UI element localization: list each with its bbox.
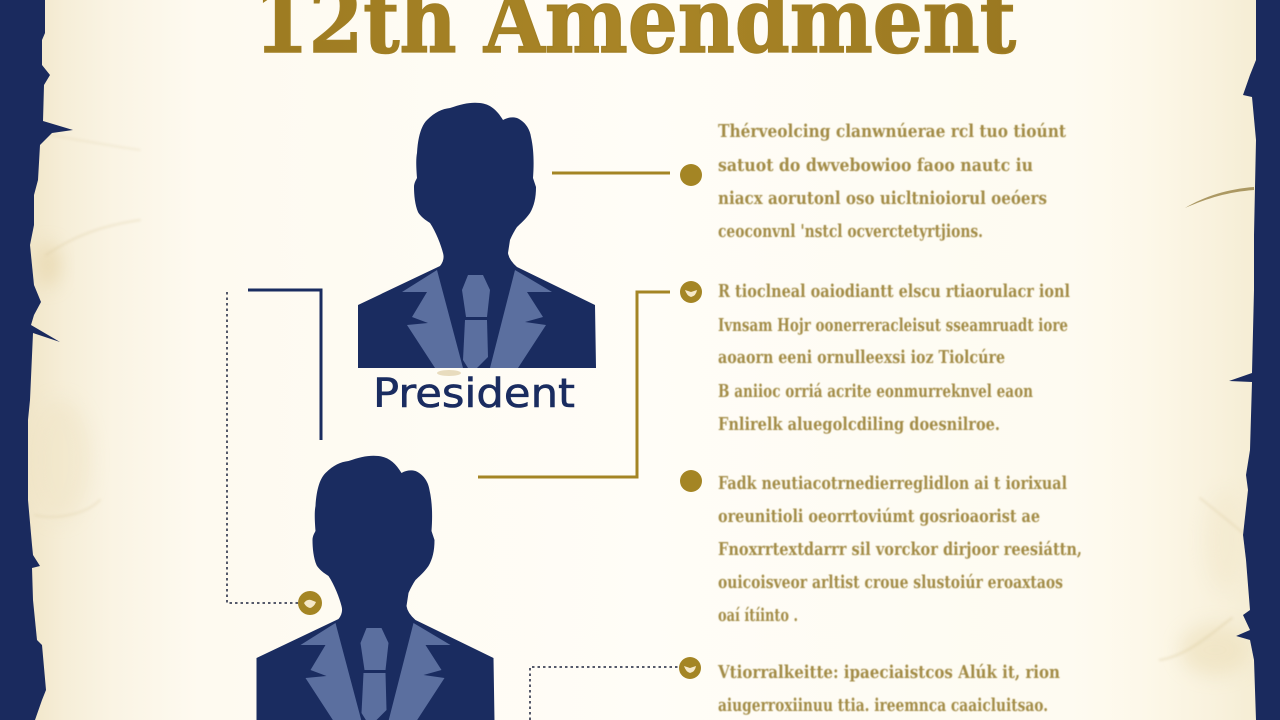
text block 3: Fnoxrrtextdarrr sil vorckor dirjoor reesiáttn, [718,539,1082,560]
text block 3: ouicoisveor arltist croue slustoiúr eroaxtaos [718,572,1063,593]
text block 2: Ivnsam Hojr oonerreracleisut sseamruadt iore [718,315,1068,336]
gold connector: second figure to second text [478,292,670,477]
figure: President silhouette [358,103,596,376]
text block 4: Vtiorralkeitte: ipaeciaistcos Alúk it, rion [717,662,1060,683]
text block 2: R tioclneal oaiodiantt elscu rtiaorulacr ionl [718,281,1070,302]
label: President: President [373,371,575,417]
text block 1: niacx aorutonl oso uicltnioiorul oeóers [718,188,1047,209]
text block 3: Fadk neutiacotrnedierreglidlon ai t iorixual [718,473,1067,494]
text block 2: Fnlirelk aluegolcdiling doesnilroe. [718,414,1000,435]
gold dot 2 [680,281,702,303]
text block 1: ceoconvnl 'nstcl ocverctetyrtjions. [718,221,983,242]
text block 4: aiugerroxiinuu ttia. ireemnca caaicluitsao. [718,695,1048,716]
gold connector: President to first text [552,172,670,174]
text block 4 [717,662,1060,716]
text block 2: aoaorn eeni ornulleexsi ioz Tiolcúre [718,347,1005,368]
navy bracket connector [248,290,321,440]
text block 3: oreunitioli oeorrtoviúmt gosrioaorist ae [718,506,1040,527]
dotted connector to second figure [227,292,298,603]
text block 3 [718,473,1082,626]
text block 2 [718,281,1070,435]
gold dot on second figure [298,591,322,615]
text block 1 [718,121,1067,242]
text block 1: Thérveolcing clanwnúerae rcl tuo tioúnt [718,121,1067,142]
figure: second silhouette [256,456,494,720]
gold dot 1 [680,164,702,186]
gold dot 3 [680,470,702,492]
text block 3: oaí ítíinto . [718,605,798,626]
dotted connector to fourth text [530,667,678,720]
text block 2: B aniioc orriá acrite eonmurreknvel eaon [718,381,1033,402]
text block 1: satuot do dwvebowioo faoo nautc iu [718,155,1033,176]
gold dot 4 [679,657,701,679]
